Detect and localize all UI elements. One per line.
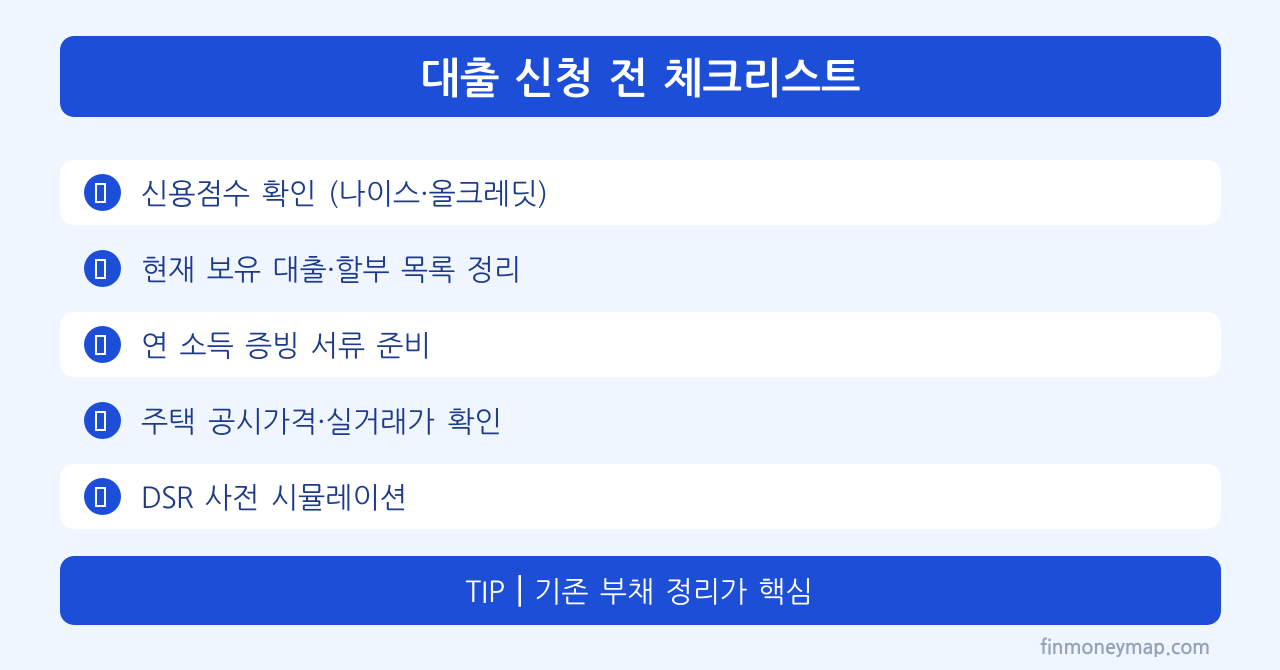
checklist item 4: [84, 402, 502, 439]
icon: check bullet 4: [84, 402, 121, 439]
item text 1: 신용점수 확인 (나이스·올크레딧): [141, 180, 548, 209]
icon: check bullet 5: [84, 478, 121, 515]
item text 4: 주택 공시가격·실거래가 확인: [141, 408, 502, 437]
footer source: finmoneymap.com: [1040, 637, 1210, 657]
tip banner: TIP 기존 부채 정리가 핵심: [465, 578, 813, 607]
title: [60, 36, 1221, 117]
checklist item 3: [60, 312, 1221, 377]
checklist item 1: [60, 160, 1221, 225]
tip banner: |: [515, 574, 524, 609]
icon: check bullet 3: [84, 326, 121, 363]
item text 3: 연 소득 증빙 서류 준비: [141, 332, 431, 361]
icon: check bullet 1: [84, 174, 121, 211]
item text 2: 현재 보유 대출·할부 목록 정리: [141, 256, 521, 285]
checklist item 5: [60, 464, 1221, 529]
icon: check bullet 2: [84, 250, 121, 287]
checklist item 2: [84, 250, 521, 287]
item text 5: DSR 사전 시뮬레이션: [141, 484, 407, 513]
title: 대출 신청 전 체크리스트: [420, 59, 860, 100]
tip banner: [60, 556, 1221, 625]
